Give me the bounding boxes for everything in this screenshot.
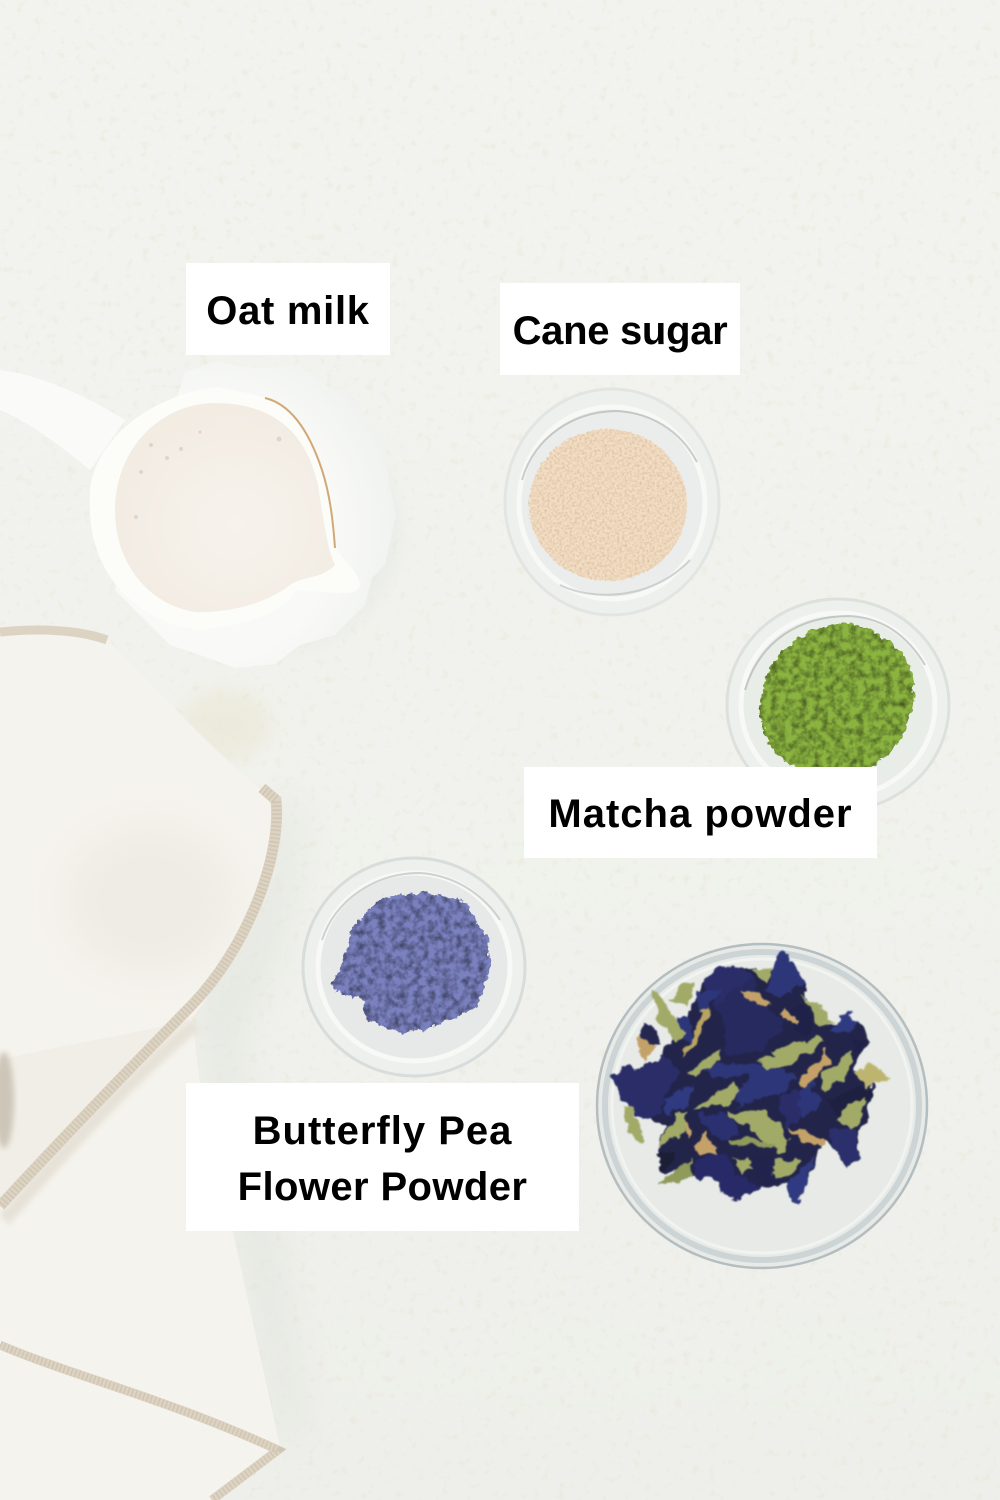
label: matcha powder: Matcha powder: [548, 792, 853, 836]
label: butterfly pea flower powder: [186, 1083, 579, 1231]
label: matcha powder: [524, 767, 877, 858]
label: cane sugar: [500, 283, 740, 375]
icon: dried flowers bowl: [596, 943, 928, 1269]
icon: milk pitcher: [0, 362, 400, 668]
label: butterfly pea flower powder: Butterfly Pea: [253, 1108, 512, 1152]
icon: butterfly pea powder bowl: [303, 858, 525, 1076]
icon: sugar bowl: [505, 389, 719, 615]
label: cane sugar: Cane sugar: [513, 308, 727, 352]
label: oat milk: [186, 263, 390, 355]
icon: linen napkin: [0, 630, 305, 1500]
label: oat milk: Oat milk: [206, 288, 370, 332]
icon: matcha bowl: [727, 599, 949, 811]
label: butterfly pea flower powder: Flower Powder: [238, 1164, 527, 1208]
